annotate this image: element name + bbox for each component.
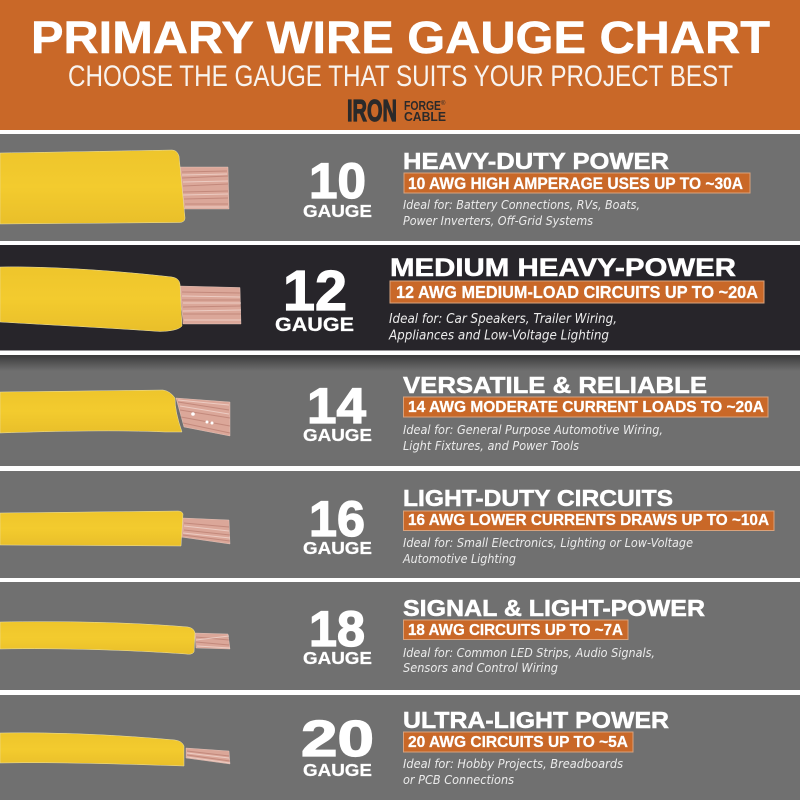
text: light-duty circuits: [402, 485, 774, 566]
amperage tag: 10 AWG HIGH AMPERAGE USES UP TO ~30A: [408, 175, 743, 193]
wire: 16 gauge: [0, 511, 230, 546]
gauge number 10: 10: [309, 153, 366, 209]
gauge number 10: [303, 153, 372, 221]
amperage tag: 12 AWG MEDIUM-LOAD CIRCUITS UP TO ~20A: [396, 282, 758, 302]
text: light-duty circuits: LIGHT-DUTY CIRCUITS: [403, 485, 673, 511]
gauge number 10: GAUGE: [303, 201, 372, 221]
ideal uses: [388, 312, 617, 344]
ideal uses: Appliances and Low-Voltage Lighting: [388, 328, 609, 344]
row: 12 gauge: [0, 245, 800, 350]
gauge number 14: 14: [307, 378, 366, 434]
text: medium heavy-power: [388, 254, 764, 344]
text: signal and light-power: [403, 595, 705, 675]
row: 14 gauge: [0, 355, 800, 466]
ideal uses: Automotive Lighting: [402, 552, 516, 566]
ideal uses: or PCB Connections: [403, 773, 514, 787]
ideal uses: Power Inverters, Off-Grid Systems: [403, 214, 593, 228]
gauge number 20: [301, 710, 374, 780]
amperage tag: 16 AWG LOWER CURRENTS DRAWS UP TO ~10A: [408, 512, 769, 529]
gauge number 12: [275, 259, 354, 336]
gauge number 14: GAUGE: [303, 425, 372, 445]
logo: ®: [441, 100, 446, 107]
gauge number 12: GAUGE: [275, 314, 354, 336]
ideal uses: Ideal for: Hobby Projects, Breadboards: [403, 757, 623, 771]
text: versatile and reliable: VERSATILE & RELIABLE: [403, 372, 707, 398]
ideal uses: Ideal for: Common LED Strips, Audio Signals,: [403, 646, 655, 660]
ideal uses: [403, 646, 655, 675]
ideal uses: Light Fixtures, and Power Tools: [403, 439, 579, 453]
gauge number 16: [303, 491, 372, 558]
ideal uses: Sensors and Control Wiring: [403, 661, 558, 675]
gauge number 20: 20: [301, 710, 374, 767]
wire: 18 gauge: [0, 622, 230, 654]
text: ultra-light power: ULTRA-LIGHT POWER: [403, 707, 669, 733]
text: heavy-duty power: [403, 148, 750, 228]
ideal uses: Ideal for: Battery Connections, RVs, Boats,: [403, 198, 640, 212]
amperage tag: 20 AWG CIRCUITS UP TO ~5A: [408, 734, 628, 751]
amperage tag: 18 AWG CIRCUITS UP TO ~7A: [408, 622, 623, 639]
logo: FORGE: [404, 99, 441, 113]
ideal uses: [403, 757, 623, 787]
gauge number 18: 18: [309, 601, 365, 657]
text: ultra-light power: [403, 707, 669, 787]
gauge number 12: 12: [283, 259, 347, 323]
wire: 12 gauge: [0, 267, 241, 332]
gauge number 14: [303, 378, 372, 445]
logo: IRON: [347, 93, 397, 128]
gauge number 16: GAUGE: [303, 538, 372, 558]
gauge number 16: 16: [309, 491, 365, 547]
row: 10 gauge: [0, 134, 800, 241]
wire: 14 gauge: [0, 390, 230, 436]
header banner: [0, 0, 800, 130]
gauge number 18: GAUGE: [303, 648, 372, 668]
row: 20 gauge: [0, 695, 800, 800]
text: versatile and reliable: [403, 372, 768, 453]
ideal uses: [403, 423, 663, 453]
ideal uses: Ideal for: Car Speakers, Trailer Wiring,: [389, 312, 617, 327]
ideal uses: Ideal for: Small Electronics, Lighting or Low-Voltage: [403, 536, 693, 550]
gauge number 18: [303, 601, 372, 668]
row: 16 gauge: [0, 471, 800, 578]
wire: 10 gauge: [0, 150, 229, 224]
text: medium heavy-power: MEDIUM HEAVY-POWER: [390, 254, 736, 282]
ideal uses: [403, 198, 640, 228]
gauge number 20: GAUGE: [303, 760, 372, 780]
row: 18 gauge: [0, 582, 800, 690]
text: heavy-duty power: HEAVY-DUTY POWER: [403, 148, 669, 174]
wire: 20 gauge: [0, 733, 230, 766]
text: signal and light-power: SIGNAL & LIGHT-POWER: [403, 595, 705, 621]
logo: CABLE: [404, 110, 446, 124]
amperage tag: 14 AWG MODERATE CURRENT LOADS TO ~20A: [408, 399, 764, 416]
ideal uses: Ideal for: General Purpose Automotive Wiring,: [403, 423, 663, 437]
ideal uses: [402, 536, 693, 566]
title: PRIMARY WIRE GAUGE CHART: [31, 12, 770, 63]
